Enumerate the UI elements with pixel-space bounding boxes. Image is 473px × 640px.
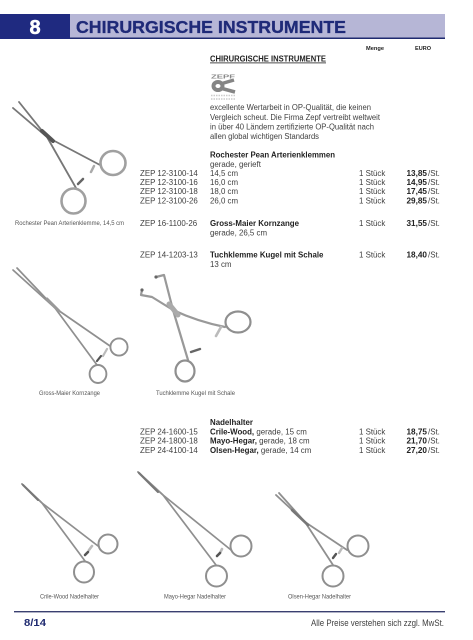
product: Tuchklemme: /St. bbox=[428, 250, 440, 260]
product group: Rochester Pean: gerade, gerieft bbox=[210, 160, 262, 169]
product group: Nadelhalter: Crile-Wood, gerade, 15 cm bbox=[210, 427, 307, 436]
product group: Rochester Pean: ZEP 12-3100-16 bbox=[140, 178, 198, 187]
product group: Nadelhalter: Olsen-Hegar, gerade, 14 cm bbox=[210, 446, 312, 455]
caption: Mayo-Hegar Nadelhalter bbox=[164, 594, 226, 600]
intro text block: Vergleich scheut. Die Firma Zepf vertreibt weltweit bbox=[210, 113, 381, 122]
product group: Nadelhalter: Nadelhalter bbox=[210, 418, 253, 427]
column headings: EURO bbox=[415, 46, 432, 52]
icon: Zepf logo: ZEPF bbox=[211, 74, 236, 80]
title: CHIRURGISCHE INSTRUMENTE bbox=[76, 17, 346, 37]
product group: Rochester Pean: 1 Stück bbox=[359, 178, 385, 187]
icon: Tuchklemme bbox=[140, 275, 250, 382]
column headings bbox=[366, 46, 432, 52]
intro text block: in über 40 Ländern zertifizierte OP-Qualität nach bbox=[210, 122, 374, 132]
product group: Nadelhalter: 1 Stück bbox=[359, 437, 385, 446]
product: Gross-Maier Kornzange: 31,55 bbox=[406, 219, 427, 228]
product group: Nadelhalter: 18,75 bbox=[406, 427, 427, 436]
header band bbox=[0, 14, 445, 39]
product group: Rochester Pean: 1 Stück bbox=[359, 187, 385, 196]
product group: Nadelhalter: 1 Stück bbox=[359, 446, 385, 455]
section heading: CHIRURGISCHE INSTRUMENTE bbox=[210, 54, 327, 64]
product group: Nadelhalter: /St. bbox=[428, 446, 440, 455]
product: Gross-Maier Kornzange: 1 Stück bbox=[359, 219, 385, 228]
product: Gross-Maier Kornzange: gerade, 26,5 cm bbox=[210, 228, 267, 238]
product group: Rochester Pean: 14,5 cm bbox=[210, 169, 238, 178]
icon: Zepf logo bbox=[211, 74, 236, 99]
product group: Rochester Pean: /St. bbox=[428, 187, 440, 196]
caption: Gross-Maier Kornzange bbox=[39, 390, 101, 397]
page number: 8/14 bbox=[24, 618, 46, 629]
product group: Rochester Pean: 13,85 bbox=[406, 169, 427, 178]
product: Tuchklemme bbox=[140, 250, 440, 269]
product group: Nadelhalter: 21,70 bbox=[406, 437, 427, 446]
product group: Rochester Pean: 1 Stück bbox=[359, 169, 385, 178]
product group: Rochester Pean: /St. bbox=[428, 169, 440, 178]
product group: Rochester Pean: 16,0 cm bbox=[210, 178, 238, 187]
icon: Rochester Pean clamp bbox=[13, 102, 126, 214]
product group: Rochester Pean: 26,0 cm bbox=[210, 196, 238, 206]
icon: Mayo-Hegar needle holder bbox=[138, 472, 252, 586]
product: Tuchklemme: 18,40 bbox=[406, 250, 427, 260]
product group: Nadelhalter: ZEP 24-1600-15 bbox=[140, 427, 198, 436]
footer note: Alle Preise verstehen sich zzgl. MwSt. bbox=[311, 618, 444, 628]
caption: Crile-Wood Nadelhalter bbox=[40, 594, 99, 600]
product group: Nadelhalter: ZEP 24-1800-18 bbox=[140, 437, 198, 446]
product: Tuchklemme: Tuchklemme Kugel mit Schale bbox=[210, 250, 324, 260]
caption: Olsen-Hegar Nadelhalter bbox=[288, 594, 351, 600]
product group: Nadelhalter: 1 Stück bbox=[359, 427, 385, 436]
caption: Tuchklemme Kugel mit Schale bbox=[156, 390, 236, 397]
intro text block: excellente Wertarbeit in OP-Qualität, die keinen bbox=[210, 103, 371, 112]
product group: Rochester Pean: 14,95 bbox=[406, 178, 427, 187]
intro text block bbox=[210, 103, 381, 141]
product group: Rochester Pean: 18,0 cm bbox=[210, 187, 238, 196]
intro text block: allen global wichtigen Standards bbox=[210, 132, 319, 141]
caption: Rochester Pean Arterienklemme, 14,5 cm bbox=[15, 220, 124, 227]
product: Gross-Maier Kornzange: ZEP 16-1100-26 bbox=[140, 219, 198, 228]
product group: Rochester Pean: 17,45 bbox=[406, 187, 427, 196]
product: Tuchklemme: 13 cm bbox=[210, 260, 232, 269]
chapter number: 8 bbox=[29, 17, 41, 39]
product group: Rochester Pean: 29,85 bbox=[406, 196, 427, 206]
product: Gross-Maier Kornzange: Gross-Maier Kornzange bbox=[210, 219, 300, 228]
product: Gross-Maier Kornzange bbox=[140, 219, 440, 238]
product: Gross-Maier Kornzange: /St. bbox=[428, 219, 440, 228]
product group: Nadelhalter: /St. bbox=[428, 437, 440, 446]
icon: Gross-Maier forceps bbox=[13, 268, 128, 383]
column headings: Menge bbox=[366, 46, 384, 52]
product group: Rochester Pean: /St. bbox=[428, 196, 440, 206]
product group: Nadelhalter: ZEP 24-4100-14 bbox=[140, 446, 198, 455]
product group: Rochester Pean: ZEP 12-3100-26 bbox=[140, 196, 198, 206]
product group: Nadelhalter: 27,20 bbox=[406, 446, 427, 455]
product: Tuchklemme: 1 Stück bbox=[359, 250, 385, 260]
product group: Rochester Pean: 1 Stück bbox=[359, 196, 385, 206]
product: Tuchklemme: ZEP 14-1203-13 bbox=[140, 250, 198, 260]
icon: Olsen-Hegar needle holder bbox=[276, 493, 368, 586]
product group: Nadelhalter: Mayo-Hegar, gerade, 18 cm bbox=[210, 437, 310, 446]
icon: Crile-Wood needle holder bbox=[22, 484, 118, 582]
product group: Nadelhalter: /St. bbox=[428, 427, 440, 436]
product group: Rochester Pean bbox=[140, 150, 440, 206]
product group: Rochester Pean: ZEP 12-3100-18 bbox=[140, 187, 198, 196]
product group: Rochester Pean: ZEP 12-3100-14 bbox=[140, 169, 198, 178]
product group: Nadelhalter bbox=[140, 418, 440, 455]
product group: Rochester Pean: /St. bbox=[428, 178, 440, 187]
product group: Rochester Pean: Rochester Pean Arterienklemmen bbox=[210, 150, 335, 160]
